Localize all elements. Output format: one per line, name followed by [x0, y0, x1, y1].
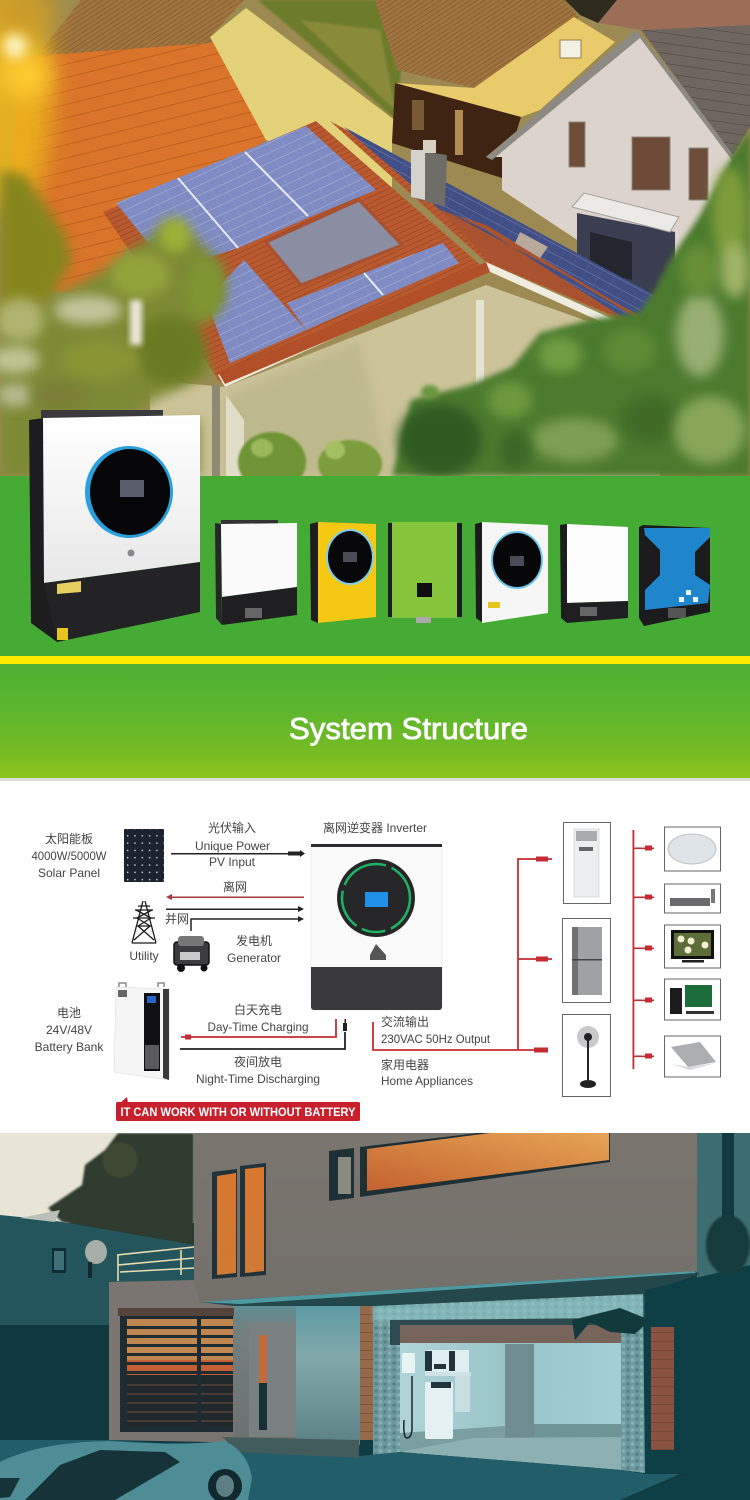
arrow: discharging line [180, 1019, 347, 1049]
white house [486, 25, 750, 300]
photo: house roof with solar panels [0, 0, 750, 492]
product: white inverter with LCD [215, 520, 297, 625]
orange roof [10, 42, 266, 300]
label: on-grid: 并网 [165, 912, 189, 926]
eave [199, 1271, 700, 1306]
heading: System Structure: System Structure [289, 711, 528, 746]
label: generator [227, 933, 281, 965]
label: battery [35, 1006, 104, 1054]
icon: desktop computer box [664, 979, 720, 1020]
label: battery: 24V/48V [46, 1023, 92, 1037]
arrow: PV input line [171, 850, 305, 857]
dark balcony [392, 83, 521, 178]
wood cladding left [360, 1305, 373, 1440]
solar panels right slope [344, 127, 658, 322]
window pair orange [212, 1163, 266, 1279]
solar panels left slope [116, 126, 459, 363]
product: blue inverter [639, 525, 710, 626]
label: AC output: 230VAC 50Hz Output [381, 1032, 491, 1046]
sunlit foliage left [0, 0, 225, 476]
icon: generator [174, 936, 209, 972]
photo: house at dusk with garage energy storage [0, 1133, 750, 1500]
icon: television box [664, 925, 720, 968]
title band [0, 664, 750, 781]
left louvred window [118, 1308, 234, 1432]
callout: works with or without battery [116, 1097, 360, 1121]
label: day-time charging: Day-Time Charging [208, 1020, 308, 1034]
stucco wall by door [296, 1303, 360, 1440]
lower wall [109, 1280, 360, 1445]
arrow: utility to inverter [166, 906, 304, 912]
solar thermal collector [266, 200, 402, 285]
blurred tree right [392, 130, 750, 476]
label: PV input: PV Input [209, 855, 256, 869]
icon: hybrid inverter [311, 844, 442, 1010]
label: solar panel: 太阳能板 [45, 831, 93, 846]
label: solar panel [32, 831, 107, 880]
yellow gable wall [210, 8, 404, 190]
product: yellow inverter [310, 522, 376, 623]
label: PV input [195, 820, 270, 869]
label: night-time discharging: 夜间放电 [234, 1054, 282, 1069]
right column [697, 1133, 750, 1283]
green product band [0, 476, 750, 656]
label: day-time charging [208, 1002, 308, 1034]
label: PV input: 光伏输入 [208, 820, 256, 835]
icon: DVD player box [664, 884, 720, 913]
garage stone frame [373, 1294, 645, 1473]
upper wall [194, 1133, 698, 1302]
centre brown roof [375, 0, 579, 88]
icon: refrigerator box [562, 918, 610, 1002]
label: inverter title: 离网逆变器 Inverter [323, 820, 427, 835]
label: battery: Battery Bank [35, 1040, 104, 1054]
hanging leaves [572, 1215, 750, 1340]
label: home appliances: 家用电器 [381, 1057, 429, 1072]
window upper [329, 1133, 610, 1201]
red roof left slope [103, 121, 486, 382]
label: utility: Utility [129, 949, 159, 963]
yellow house [395, 17, 615, 117]
balcony rail [117, 1247, 194, 1281]
tree silhouette [48, 1133, 194, 1248]
icon: solar panel [124, 829, 164, 882]
arrow: appliance bus [632, 830, 654, 1069]
front door [249, 1323, 296, 1437]
icon: laptop box [664, 1036, 720, 1077]
icon: utility tower [132, 901, 156, 943]
label: battery: 电池 [57, 1006, 81, 1020]
chimney [411, 140, 447, 207]
label: AC output: 交流输出 [381, 1014, 429, 1029]
car [0, 1441, 252, 1500]
driveway [0, 1440, 680, 1500]
label: solar panel: 4000W/5000W [32, 849, 107, 863]
icon: fan box [562, 1014, 610, 1096]
label: generator: Generator [227, 951, 281, 965]
label: home appliances [381, 1057, 473, 1088]
arrow: AC output wiring [373, 856, 552, 1052]
garage interior [400, 1325, 621, 1470]
red roof right slope [330, 121, 638, 318]
label: PV input: Unique Power [195, 839, 270, 853]
dark garden right [620, 1265, 750, 1500]
shrubs [236, 430, 384, 476]
yellow stripe [0, 656, 750, 664]
garage energy storage system [402, 1350, 471, 1439]
arrow: generator to inverter [191, 916, 304, 931]
product: large inverter [29, 410, 200, 642]
neighbouring building [0, 1210, 194, 1325]
icon: air conditioner box [564, 822, 610, 904]
label: off-grid: 离网 [223, 879, 247, 894]
gable wall below roof [150, 285, 660, 476]
panel: white system diagram [0, 781, 750, 1133]
wall beside door [234, 1303, 296, 1440]
label: generator: 发电机 [236, 933, 272, 948]
icon: battery bank [114, 983, 169, 1080]
label: home appliances: Home Appliances [381, 1074, 473, 1088]
arrow: off-grid line [166, 894, 304, 900]
label: solar panel: Solar Panel [38, 866, 100, 880]
sky [0, 1133, 200, 1223]
label: AC output [381, 1014, 491, 1046]
product: white round inverter [475, 522, 548, 623]
label: night-time discharging [196, 1054, 320, 1086]
arrow: charging line [181, 1019, 336, 1040]
product: green inverter [388, 522, 462, 623]
background tree [258, 0, 402, 120]
background brown roof left [36, 0, 244, 57]
product: white inverter narrow [560, 524, 628, 623]
top right roof [598, 0, 750, 30]
wood column right [651, 1327, 674, 1450]
label: day-time charging: 白天充电 [234, 1002, 282, 1017]
icon: ceiling lamp box [664, 827, 720, 871]
entrance steps [222, 1437, 359, 1458]
label: night-time discharging: Night-Time Discharging [196, 1072, 320, 1086]
callout: works with or without battery: IT CAN WORK WITH OR WITHOUT BATTERY [120, 1105, 356, 1119]
